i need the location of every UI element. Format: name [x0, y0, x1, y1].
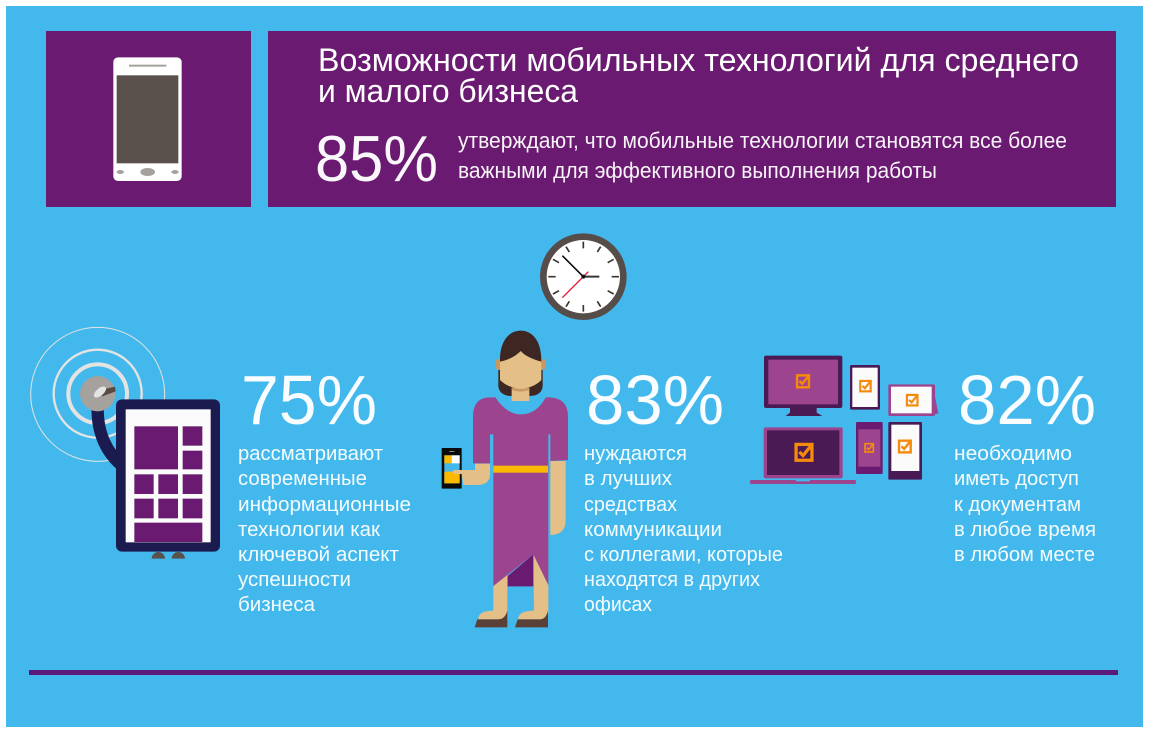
- panel: header: [268, 31, 1116, 207]
- stat: 85%: 85%: [315, 122, 438, 195]
- description: современные: [238, 467, 367, 490]
- description: нуждаются: [584, 442, 687, 465]
- number: 75%: [241, 361, 377, 439]
- icon: clock: [540, 233, 627, 320]
- text: 85% description: утверждают, что мобильные технологии становятся все более: [458, 128, 1067, 153]
- monitor: [764, 356, 842, 416]
- title: [318, 42, 1079, 109]
- number: 82%: [958, 361, 1096, 439]
- icon: woman with phone: [442, 331, 568, 627]
- description: находятся в других: [584, 568, 761, 591]
- description: технологии как: [238, 518, 381, 541]
- text: 85% description: важными для эффективного выполнения работы: [458, 158, 937, 183]
- description: коммуникации: [584, 518, 722, 541]
- description: офисах: [584, 593, 653, 616]
- small phone: [856, 422, 883, 474]
- title: и малого бизнеса: [318, 73, 578, 109]
- description: в лучших: [584, 467, 673, 490]
- large phone: [888, 422, 922, 480]
- text: 85% description: [458, 128, 1067, 183]
- stat block: 83%: [584, 361, 783, 616]
- title: Возможности мобильных технологий для среднего: [318, 42, 1079, 78]
- description: средствах: [584, 493, 678, 516]
- panel: phone icon: [46, 31, 251, 207]
- description: необходимо: [954, 442, 1072, 465]
- description: информационные: [238, 493, 411, 516]
- description: [954, 442, 1096, 566]
- tablet on stand: [888, 384, 938, 416]
- description: [584, 442, 783, 616]
- phone: [850, 365, 880, 410]
- stat block: 82%: [954, 361, 1096, 566]
- description: к документам: [954, 493, 1081, 516]
- description: иметь доступ: [954, 467, 1079, 490]
- stat block: 75%: [238, 361, 411, 616]
- description: в любом месте: [954, 543, 1095, 566]
- description: в любое время: [954, 518, 1096, 541]
- description: с коллегами, которые: [584, 543, 783, 566]
- number: 83%: [586, 361, 724, 439]
- laptop: [750, 427, 856, 484]
- description: [238, 442, 411, 616]
- signal rings: [31, 327, 165, 461]
- description: бизнеса: [238, 593, 316, 616]
- description: ключевой аспект: [238, 543, 400, 566]
- icon: tablet with dial: [31, 327, 220, 559]
- description: рассматривают: [238, 442, 384, 465]
- icon: devices group: [750, 356, 938, 484]
- icon: smartphone: [113, 57, 182, 181]
- description: успешности: [238, 568, 351, 591]
